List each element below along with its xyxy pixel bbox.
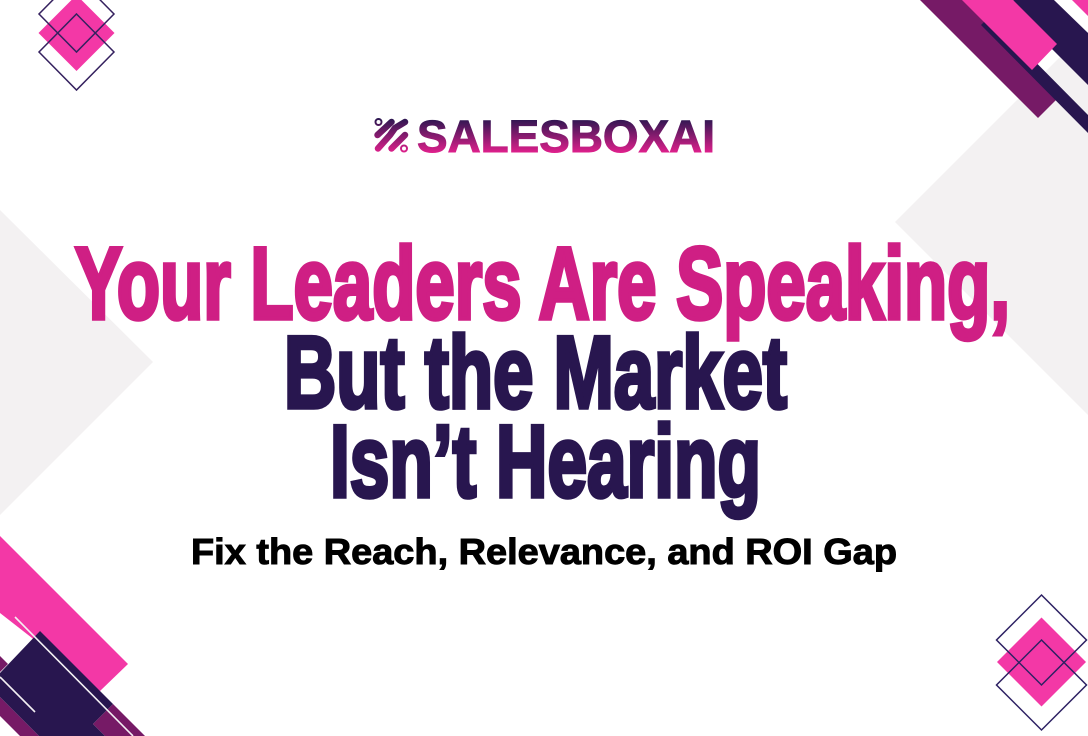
decoration: bottom-left diagonal bands <box>0 536 145 736</box>
background: left grey triangle <box>0 210 153 515</box>
subtitle: Fix the Reach, Relevance, and ROI Gap <box>191 531 897 572</box>
decoration: top-right diagonal bands <box>920 0 1088 133</box>
decoration: bottom-right diamonds <box>996 595 1086 730</box>
logo wordmark: SALESBOXAI <box>417 111 715 162</box>
background: right grey diamond <box>895 32 1088 415</box>
decoration: top-left diamonds <box>38 0 114 90</box>
logo: SalesBoxAI <box>376 111 715 162</box>
title line 3: Isn’t Hearing <box>330 404 761 518</box>
title line 2: But the Market <box>284 316 787 430</box>
title <box>75 226 1010 518</box>
icon: logo circuit mark <box>376 119 407 152</box>
